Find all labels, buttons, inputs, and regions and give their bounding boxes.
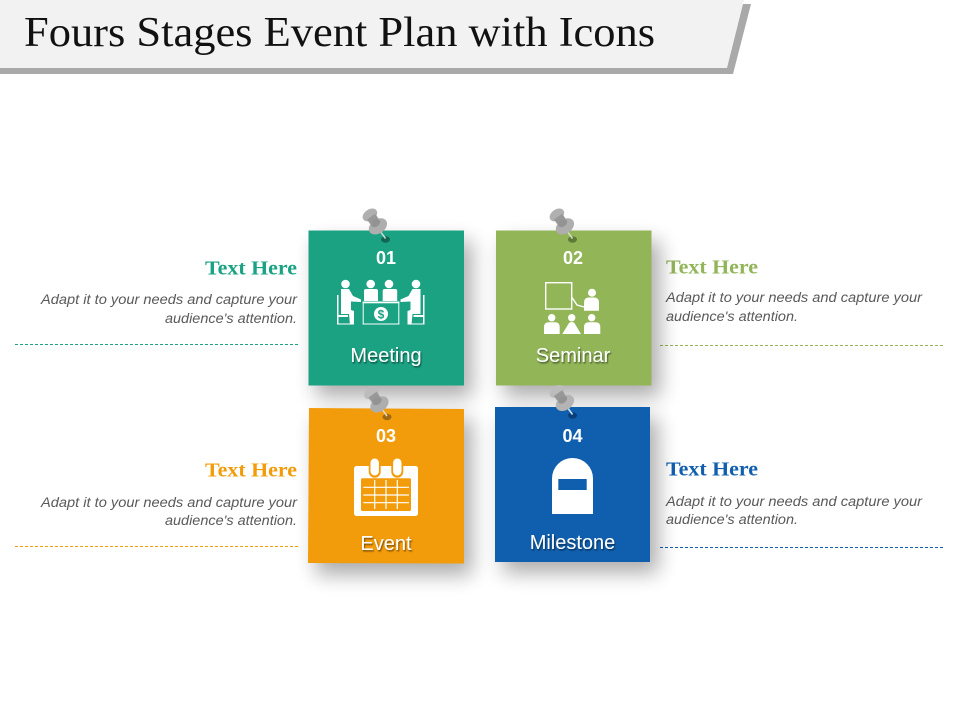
callout: 04 text right: Text Here xyxy=(666,458,758,480)
callout: 01 text left: Text Here xyxy=(205,258,297,280)
icon: pin 4 xyxy=(546,381,577,419)
callout: 04 text right: Adapt it to your needs and capture your xyxy=(665,494,923,509)
panel: 01 Meeting card: Meeting xyxy=(350,345,422,367)
panel: 04 Milestone card: 04 xyxy=(562,426,583,446)
callout: 04 text right: audience's attention. xyxy=(666,512,798,527)
callout: 01 text left: audience's attention. xyxy=(165,311,297,326)
panel: 02 Seminar card xyxy=(496,230,660,397)
panel: 04 Milestone card xyxy=(495,407,658,573)
icon: seminar xyxy=(544,283,600,334)
panel: 03 Event card: Event xyxy=(360,533,412,555)
icon: meeting xyxy=(337,280,424,324)
panel: 04 Milestone card: Milestone xyxy=(530,532,615,554)
icon: calendar xyxy=(354,458,418,516)
callout: 01 text left: Adapt it to your needs and capture your xyxy=(40,292,298,307)
icon: pin 1 xyxy=(359,205,390,243)
panel: 02 Seminar card: Seminar xyxy=(536,345,611,367)
icon: pin 2 xyxy=(546,205,577,243)
icon: pin 3 xyxy=(360,383,392,420)
callout: 03 text left: Adapt it to your needs and capture your xyxy=(40,495,298,510)
panel: 03 Event card: 03 xyxy=(376,426,396,446)
callout: 02 text right xyxy=(660,256,945,346)
title: Fours Stages Event Plan with Icons xyxy=(24,10,655,56)
panel: 01 Meeting card: 01 xyxy=(376,248,396,268)
callout: 02 text right: Adapt it to your needs and capture your xyxy=(665,290,923,305)
callout: 03 text left xyxy=(15,460,300,546)
panel: 01 Meeting card xyxy=(308,230,472,397)
callout: 01 text left xyxy=(15,258,300,344)
icon: milestone xyxy=(552,458,593,514)
callout: 04 text right xyxy=(660,458,945,548)
callout: 03 text left: Text Here xyxy=(205,460,297,482)
panel: 02 Seminar card: 02 xyxy=(563,248,583,268)
panel: 03 Event card xyxy=(308,408,472,575)
callout: 03 text left: audience's attention. xyxy=(165,513,297,528)
icon: meeting: $ xyxy=(378,308,385,322)
callout: 02 text right: audience's attention. xyxy=(666,309,798,324)
callout: 02 text right: Text Here xyxy=(666,256,758,278)
title banner xyxy=(0,0,751,74)
